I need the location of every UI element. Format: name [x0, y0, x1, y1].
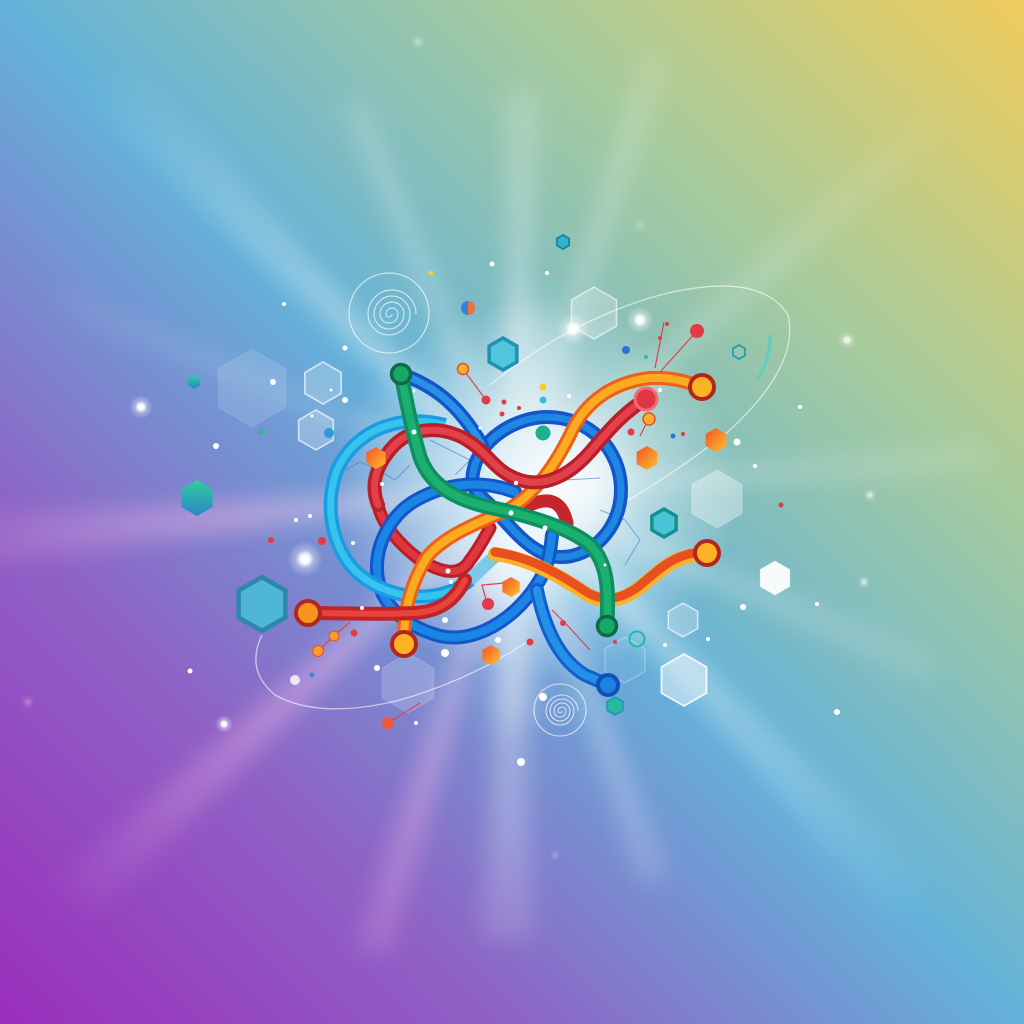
- tube: upper red: [374, 398, 647, 505]
- orbit lines: [256, 286, 790, 709]
- ring: teal: [630, 632, 644, 646]
- glowing light points: [20, 34, 877, 862]
- central glow: [330, 300, 740, 680]
- node: blue: [598, 675, 618, 695]
- node: red: [635, 388, 657, 410]
- node: orange bottom: [392, 632, 416, 656]
- node: green bottom: [598, 616, 616, 636]
- inner blue branching lines: [345, 440, 640, 565]
- orange hexagons: [366, 428, 726, 665]
- tube: orange: [404, 378, 702, 643]
- tube: green: [401, 374, 608, 625]
- node: orange upper right: [690, 375, 714, 399]
- arc: teal accent: [758, 335, 770, 378]
- tube: lower red section: [378, 501, 567, 571]
- dots: red and orange: [268, 322, 784, 729]
- tube: dark blue loop: [401, 374, 621, 557]
- node: green top: [392, 364, 410, 384]
- node: orange left: [296, 601, 320, 625]
- sparkles on tubes: [360, 390, 606, 610]
- inner light column: [460, 300, 620, 720]
- spiral icon: lower: [534, 684, 586, 736]
- tube: light blue: [331, 421, 497, 596]
- connector lines: [318, 322, 697, 723]
- dots: blue, teal, yellow: [258, 270, 676, 678]
- white sparkle dots: [188, 262, 840, 766]
- tube: red-orange right: [495, 552, 707, 600]
- tube: blue: [377, 484, 608, 685]
- spiral icon: upper: [349, 273, 429, 353]
- node: orange right: [695, 541, 719, 565]
- translucent hexagons: [218, 287, 790, 713]
- tube: red left: [308, 580, 465, 614]
- solid teal hexagons: [181, 235, 745, 715]
